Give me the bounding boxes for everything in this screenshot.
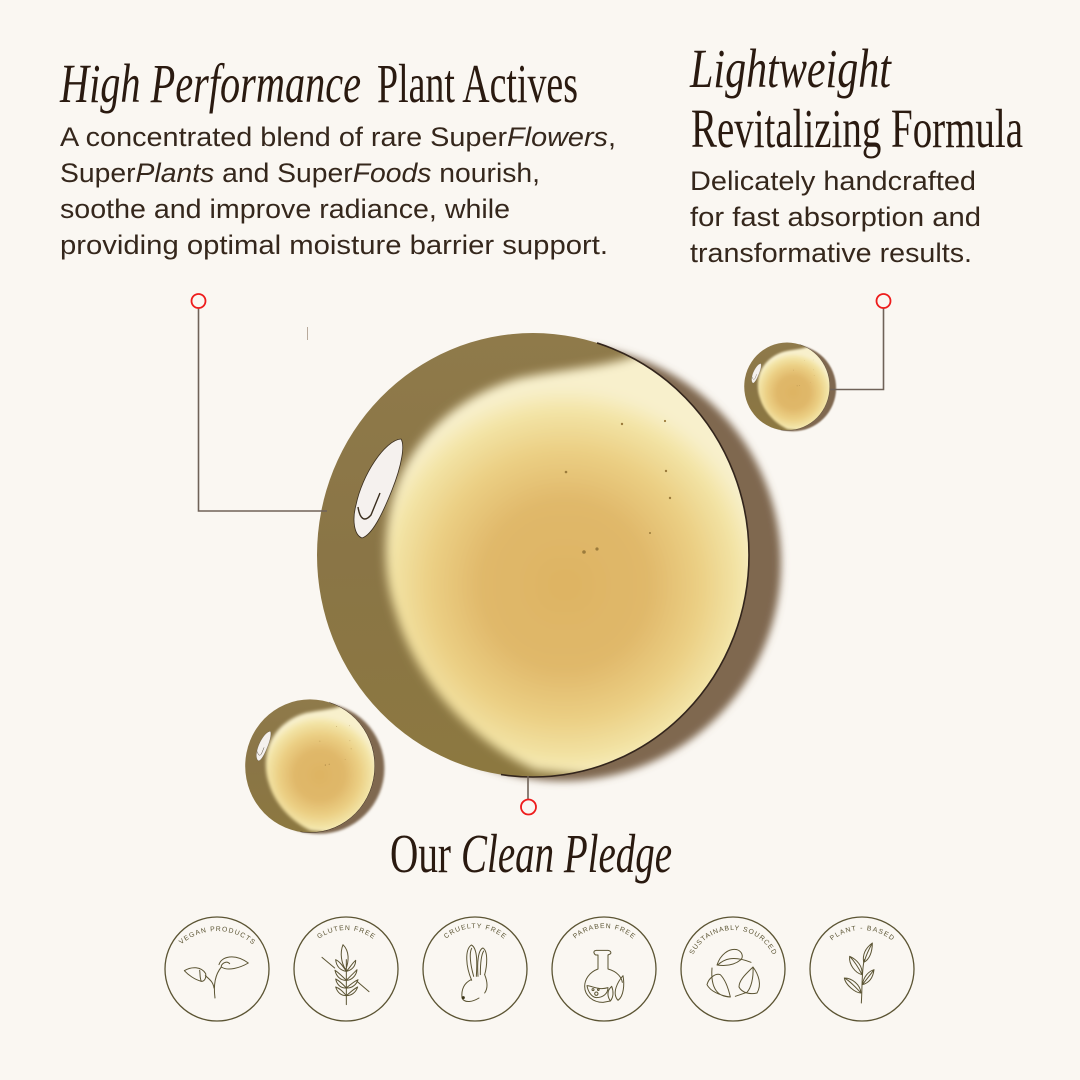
text block: plant actives description bbox=[60, 122, 616, 260]
callout connector: formula bbox=[830, 294, 890, 390]
heading: High Performance Plant Actives: Plant Actives bbox=[377, 53, 578, 114]
icon: plant-based badge bbox=[809, 916, 915, 1022]
icon: paraben free badge bbox=[551, 916, 657, 1022]
small oil droplet: lower left bbox=[245, 690, 390, 840]
text block: formula description: transformative results. bbox=[690, 238, 972, 268]
icon: plant-based badge: PLANT - BASED bbox=[830, 926, 894, 940]
icon: sustainably sourced badge bbox=[680, 916, 786, 1022]
text block: plant actives description: soothe and improve radiance, while bbox=[60, 194, 510, 224]
heading: Our Clean Pledge bbox=[390, 823, 672, 884]
icon: vegan products badge: VEGAN PRODUCTS bbox=[178, 926, 255, 944]
icon: cruelty free badge bbox=[422, 916, 528, 1022]
text block: formula description: Delicately handcrafted bbox=[690, 166, 976, 196]
small oil droplet: upper right bbox=[744, 336, 840, 435]
text block: plant actives description: providing optimal moisture barrier support. bbox=[60, 230, 608, 260]
icon: gluten free badge bbox=[293, 916, 399, 1022]
text block: plant actives description: A concentrated blend of rare Super Flowers, bbox=[60, 122, 616, 152]
large oil droplet bbox=[317, 300, 800, 800]
heading: Our Clean Pledge: Our bbox=[390, 823, 451, 884]
heading: Lightweight Revitalizing Formula bbox=[689, 38, 1023, 159]
heading: Our Clean Pledge: Clean Pledge bbox=[461, 823, 672, 884]
text block: plant actives description: SuperPlants and SuperFoods nourish, bbox=[60, 158, 540, 188]
icon: vegan products badge bbox=[164, 916, 270, 1022]
callout connector: plant actives bbox=[192, 294, 327, 511]
heading: Lightweight Revitalizing Formula: Lightweight bbox=[689, 38, 892, 99]
icon: cruelty free badge: CRUELTY FREE bbox=[444, 923, 506, 939]
heading: High Performance Plant Actives: High Performance bbox=[59, 53, 361, 114]
tick mark bbox=[306, 327, 308, 340]
icon: gluten free badge: GLUTEN FREE bbox=[317, 925, 376, 939]
text block: formula description bbox=[690, 166, 981, 268]
callout connector: clean pledge bbox=[521, 776, 536, 814]
text block: formula description: for fast absorption and bbox=[690, 202, 981, 232]
icon: paraben free badge: PARABEN FREE bbox=[572, 923, 636, 939]
icon: sustainably sourced badge: SUSTAINABLY SOURCED bbox=[690, 925, 776, 954]
